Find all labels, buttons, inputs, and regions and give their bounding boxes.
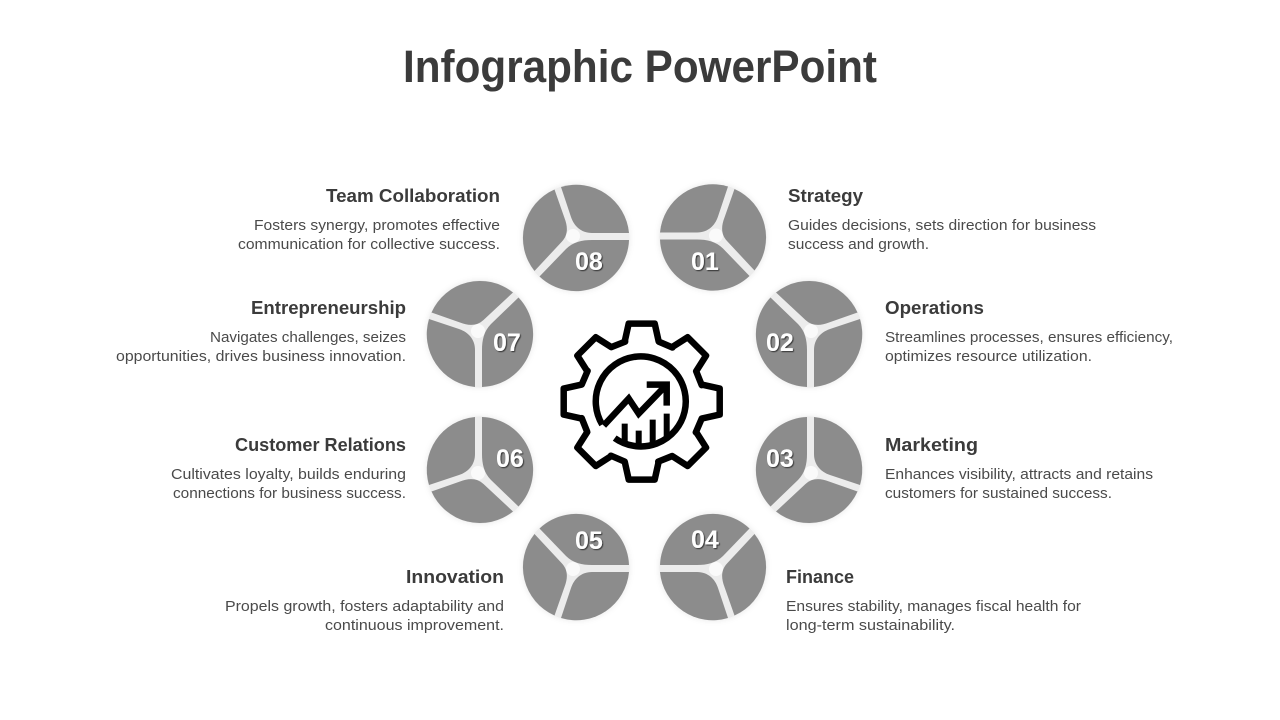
icon: gear with growth chart <box>564 324 720 480</box>
panel: 05 Innovation <box>225 514 630 634</box>
panel: 07 Entrepreneurship: opportunities, drives business innovation. <box>116 348 406 365</box>
panel: 03 Marketing: Enhances visibility, attracts and retains <box>885 466 1153 483</box>
panel: 06 Customer Relations: Customer Relations <box>235 435 406 455</box>
panel: 03 Marketing: Marketing <box>885 435 978 455</box>
panel: 05 Innovation: 05 <box>575 527 603 555</box>
dial 04 <box>660 514 766 620</box>
panel: 01 Strategy: 01 <box>691 248 719 276</box>
dial 06 <box>426 416 534 524</box>
panel: 02 Operations: optimizes resource utilization. <box>885 348 1092 365</box>
panel: 01 Strategy: Strategy <box>788 186 863 206</box>
panel: 03 Marketing: 03 <box>766 445 794 473</box>
panel: 08 Team Collaboration: 08 <box>575 248 603 276</box>
panel: 03 Marketing <box>756 416 1153 524</box>
panel: 02 Operations: 02 <box>766 329 794 357</box>
dial 08 <box>522 184 630 292</box>
panel: 07 Entrepreneurship <box>116 280 534 388</box>
panel: 08 Team Collaboration: communication for collective success. <box>238 236 500 253</box>
panel: 04 Finance: 04 <box>691 526 719 554</box>
dial 03 <box>756 416 862 524</box>
panel: 06 Customer Relations: 06 <box>496 445 524 473</box>
panel: 06 Customer Relations <box>171 416 534 524</box>
panel: 07 Entrepreneurship: Entrepreneurship <box>251 298 406 318</box>
panel: 08 Team Collaboration <box>238 184 630 292</box>
panel: 01 Strategy: success and growth. <box>788 236 929 253</box>
panel: 07 Entrepreneurship: 07 <box>493 329 521 357</box>
panel: 06 Customer Relations: Cultivates loyalty, builds enduring <box>171 466 406 483</box>
panel: 03 Marketing: customers for sustained success. <box>885 485 1112 502</box>
dial 01 <box>660 184 766 291</box>
panel: 06 Customer Relations: connections for business success. <box>173 485 406 502</box>
panel: 01 Strategy <box>660 184 1096 291</box>
panel: 04 Finance <box>660 514 1081 634</box>
dial 02 <box>756 280 862 388</box>
panel: 04 Finance: long-term sustainability. <box>786 617 955 634</box>
panel: 05 Innovation: continuous improvement. <box>325 617 504 634</box>
panel: 05 Innovation: Innovation <box>406 567 504 587</box>
panel: 05 Innovation: Propels growth, fosters adaptability and <box>225 598 504 615</box>
title: Infographic PowerPoint <box>403 41 877 92</box>
panel: 02 Operations: Streamlines processes, ensures efficiency, <box>885 329 1173 346</box>
panel: 08 Team Collaboration: Fosters synergy, promotes effective <box>254 217 500 234</box>
dial 05 <box>522 514 630 620</box>
panel: 04 Finance: Ensures stability, manages fiscal health for <box>786 598 1081 615</box>
panel: 07 Entrepreneurship: Navigates challenges, seizes <box>210 329 406 346</box>
panel: 02 Operations <box>756 280 1173 388</box>
panel: 02 Operations: Operations <box>885 298 984 318</box>
dial 07 <box>426 280 534 388</box>
panel: 01 Strategy: Guides decisions, sets direction for business <box>788 217 1096 234</box>
panel: 04 Finance: Finance <box>786 567 854 587</box>
panel: 08 Team Collaboration: Team Collaboration <box>326 186 500 206</box>
